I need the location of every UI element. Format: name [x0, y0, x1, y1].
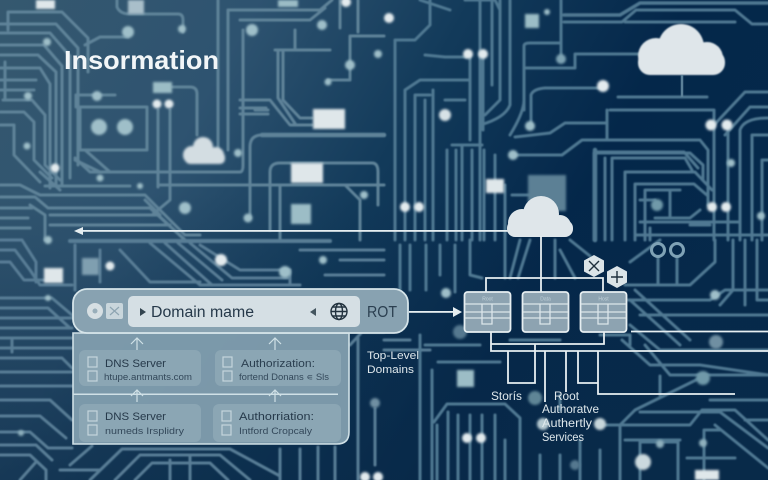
- row divider: [73, 394, 338, 395]
- cell: DNS server 2: [105, 411, 185, 436]
- cell: authorization 1: fortend Donans ∊ Sls: [239, 372, 330, 382]
- table 1: Root: [482, 296, 493, 302]
- icon: play arrow: [140, 308, 146, 316]
- cell backgrounds: [79, 350, 341, 442]
- icon: small cloud: [183, 137, 225, 164]
- up arrows: [131, 338, 281, 402]
- table 3: [580, 292, 626, 332]
- connector lines: [486, 236, 768, 402]
- label: stores: Storís: [491, 391, 522, 403]
- icon: large cloud: [638, 24, 725, 75]
- icon: globe: [331, 304, 347, 320]
- panel: domain name lookup: [73, 289, 408, 444]
- table 2: [522, 292, 568, 332]
- icon: back arrow: [310, 308, 316, 316]
- label: root: Root: [554, 391, 580, 403]
- table 3: Host: [598, 296, 609, 302]
- header bar: [73, 289, 408, 333]
- cell: authorization 2: Authorriation:: [239, 411, 314, 423]
- ROT label: ROT: [367, 304, 397, 321]
- traces: bottom left: [0, 240, 430, 480]
- table 2: Data: [540, 296, 551, 302]
- label: authoritative services: Services: [542, 432, 584, 444]
- cell: DNS server 1: htupe.antmants.com: [104, 372, 192, 382]
- domain name text: Domain mame: [151, 304, 254, 321]
- label: top-level domains: Top-Level: [367, 350, 419, 362]
- arrow: ROT to tables: [409, 307, 462, 317]
- cell: DNS server 1: DNS Server: [105, 358, 166, 370]
- icon: hexagon close: [584, 255, 604, 277]
- table 1: [464, 292, 510, 332]
- icon: central cloud: [507, 196, 573, 237]
- cell: authorization 1: [239, 358, 330, 382]
- label: top-level domains: [367, 350, 419, 376]
- icon: record button: [87, 303, 103, 319]
- address field: [128, 296, 360, 327]
- label: top-level domains: Domains: [367, 364, 415, 376]
- cell: DNS server 2: numeds Irsplidry: [105, 426, 185, 436]
- icon: close button: [106, 303, 123, 319]
- cell: DNS server 2: DNS Server: [105, 411, 166, 423]
- label: authoritative services: Authoratve: [542, 404, 599, 416]
- traces: top left: [0, 0, 384, 240]
- title: Insormation: [64, 45, 219, 75]
- label: authoritative services: [542, 404, 599, 444]
- squares: teal: [82, 0, 566, 387]
- cell: authorization 2: [239, 411, 314, 436]
- ring connectors: [652, 244, 684, 256]
- traces: right half: [395, 0, 768, 480]
- arrow: long line to the left: [74, 227, 510, 235]
- cell: DNS server 1: [104, 358, 192, 382]
- icon: hexagon plus: [607, 266, 627, 288]
- lower panel body: [73, 333, 349, 444]
- label: authoritative services: Authertly: [542, 418, 592, 430]
- cell: authorization 1: Authorization:: [241, 358, 315, 370]
- large cloud stem: [681, 75, 683, 97]
- cell: authorization 2: Intford Cropcaly: [239, 426, 313, 436]
- checkboxes: [88, 357, 232, 435]
